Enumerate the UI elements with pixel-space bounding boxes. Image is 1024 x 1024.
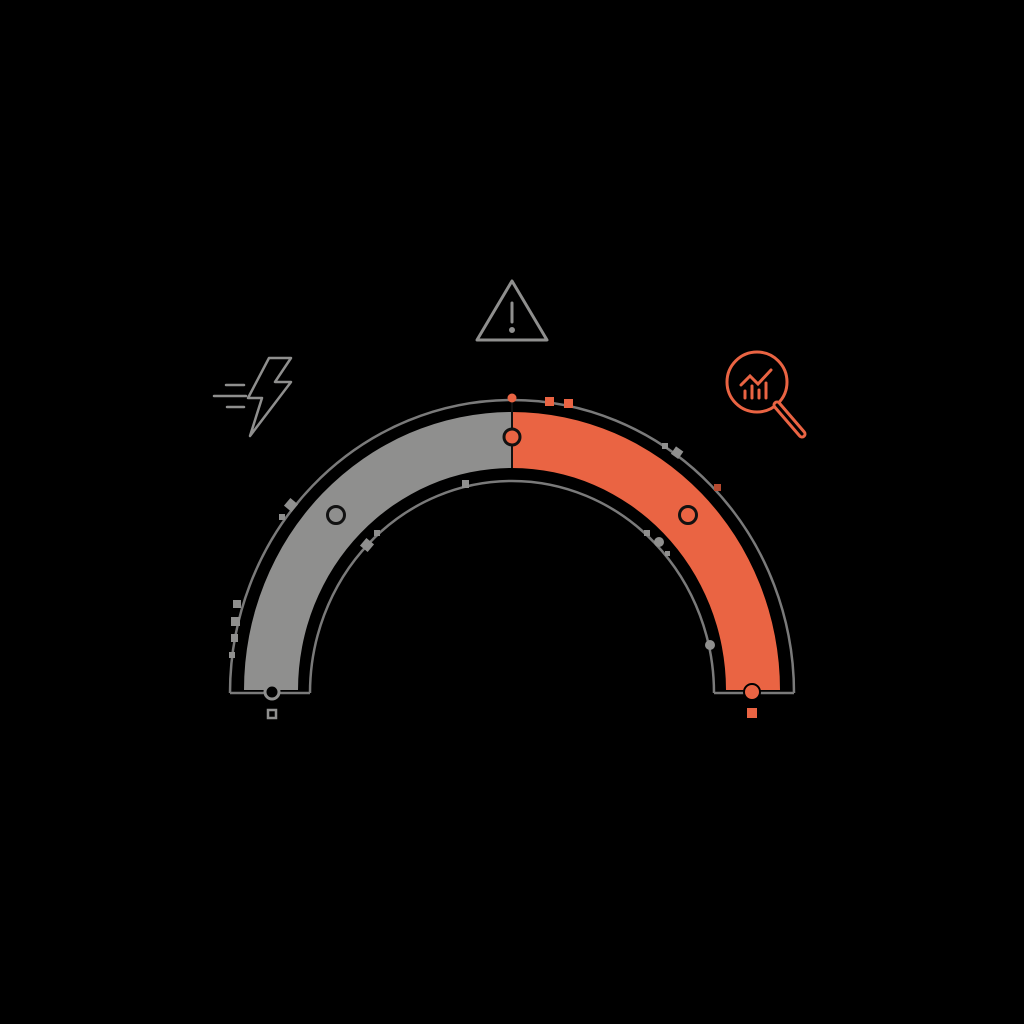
bottom brackets bbox=[230, 692, 794, 694]
marker: bottom right bbox=[744, 684, 760, 700]
gauge band: gray left bbox=[244, 412, 512, 690]
outer track line bbox=[230, 400, 794, 693]
marker: bottom left bbox=[265, 685, 279, 699]
marker: left circle bbox=[328, 506, 344, 524]
gauge band: orange right bbox=[512, 412, 780, 690]
marker: right circle bbox=[680, 506, 696, 524]
marker: top circle bbox=[504, 429, 520, 445]
tick marks bbox=[229, 443, 715, 658]
divider bbox=[511, 400, 513, 468]
icon: lightning bbox=[214, 358, 291, 436]
gauge bbox=[229, 394, 794, 718]
inner track line bbox=[310, 481, 714, 693]
icon: magnifier chart bbox=[727, 352, 802, 434]
icon: warning triangle bbox=[477, 281, 547, 340]
